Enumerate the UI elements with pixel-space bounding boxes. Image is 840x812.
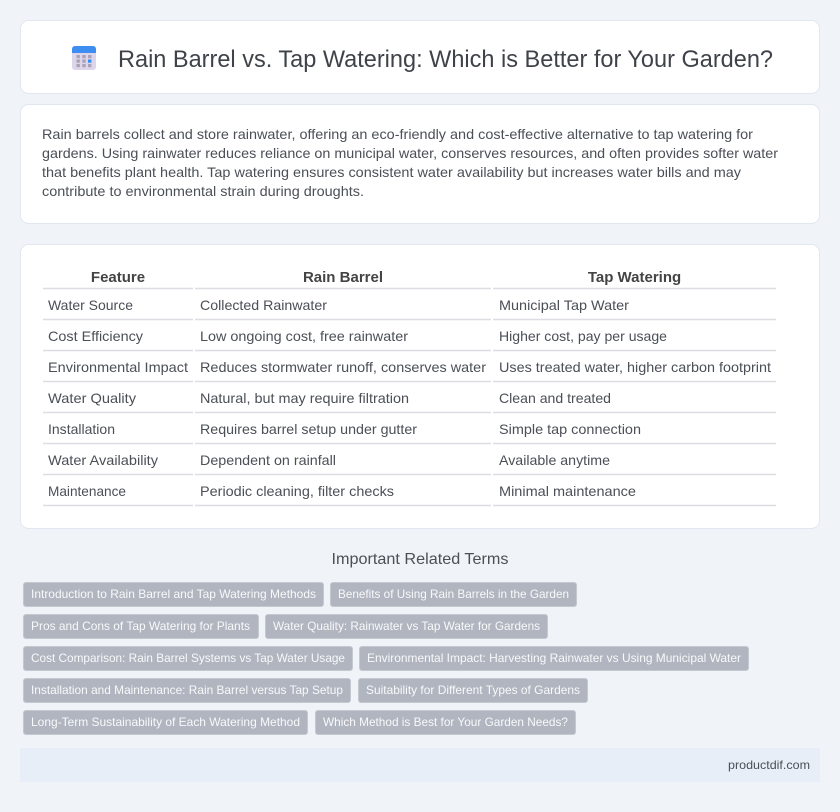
panel: introduction text [20,104,820,224]
icon: calendar [72,46,96,70]
row: water source: Water Source [48,297,133,313]
row: water quality [48,390,611,406]
panel: comparison table [20,244,820,528]
row: installation: Installation [48,421,115,437]
row: water source [48,297,629,313]
row: water source: Municipal Tap Water [499,297,629,313]
tag: Environmental Impact: Harvesting Rainwater vs Using Municipal Water [367,651,741,665]
table header row: Rain Barrel [303,269,383,286]
row: installation: Requires barrel setup under gutter [200,421,417,437]
row: cost efficiency: Low ongoing cost, free rainwater [200,328,408,344]
panel: introduction text: contribute to environmental strain during droughts. [42,183,364,199]
tag [24,646,352,670]
row: water quality: Clean and treated [499,390,611,406]
tag [24,678,350,702]
table header row: Feature [91,269,145,286]
tag [316,710,576,734]
row: water availability: Water Availability [48,452,158,468]
tag [330,582,576,606]
heading: important related terms: Important Related Terms [332,551,508,568]
row: maintenance: Maintenance [48,483,126,499]
row: cost efficiency [48,328,667,344]
panel: related term tags [24,582,748,734]
row: installation [48,421,641,437]
tag: Pros and Cons of Tap Watering for Plants [31,619,250,633]
tag [358,678,588,702]
tag [24,614,258,638]
tag [24,582,324,606]
row: environmental impact: Reduces stormwater runoff, conserves water [200,359,486,375]
panel: introduction text: that benefits plant health. Tap watering ensures consistent water availability but increases water bills and may [42,164,741,180]
row: water quality: Water Quality [48,390,136,406]
row: maintenance [48,483,636,499]
tag: Cost Comparison: Rain Barrel Systems vs Tap Water Usage [31,651,345,665]
row: water availability: Dependent on rainfall [200,452,336,468]
tag: Suitability for Different Types of Gardens [366,683,580,697]
row: cost efficiency: Higher cost, pay per usage [499,328,667,344]
tag: Introduction to Rain Barrel and Tap Watering Methods [31,587,316,601]
row: environmental impact: Uses treated water, higher carbon footprint [499,359,771,375]
row: maintenance: Minimal maintenance [499,483,636,499]
row: cost efficiency: Cost Efficiency [48,328,143,344]
table header row [91,269,681,286]
panel: title header [20,20,820,94]
tag: Which Method is Best for Your Garden Needs? [323,715,568,729]
row: installation: Simple tap connection [499,421,641,437]
tag [266,614,548,638]
panel: introduction text: gardens. Using rainwater reduces reliance on municipal water, conserves resources, and often provides softer water [42,145,778,161]
title: Rain Barrel vs. Tap Watering: Which is Better for Your Garden? [118,46,773,73]
row: water availability: Available anytime [499,452,610,468]
row: environmental impact: Environmental Impact [48,359,188,375]
row: environmental impact [48,359,771,375]
footer: productdif.com [728,758,810,772]
tag: Benefits of Using Rain Barrels in the Garden [338,587,569,601]
row: water quality: Natural, but may require filtration [200,390,409,406]
tag [24,710,308,734]
row: water source: Collected Rainwater [200,297,327,313]
footer [20,748,820,782]
tag: Long-Term Sustainability of Each Watering Method [31,715,300,729]
panel: introduction text: Rain barrels collect and store rainwater, offering an eco-friendly and cost-effective alternative to tap watering for [42,126,753,142]
tag: Water Quality: Rainwater vs Tap Water for Gardens [273,619,540,633]
row: water availability [48,452,610,468]
row: maintenance: Periodic cleaning, filter checks [200,483,394,499]
tag [360,646,748,670]
table header row: Tap Watering [588,269,681,286]
tag: Installation and Maintenance: Rain Barrel versus Tap Setup [31,683,343,697]
